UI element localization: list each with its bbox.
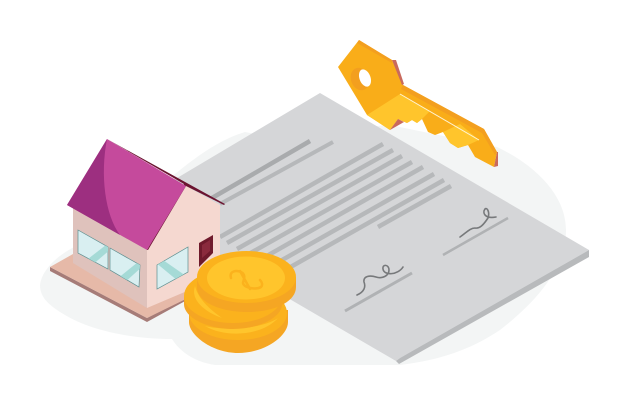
house base side (50, 267, 187, 322)
key highlight (400, 94, 479, 140)
body text lines (220, 144, 451, 273)
key body (338, 40, 497, 167)
signature left (345, 265, 412, 311)
window left 1 (78, 230, 111, 269)
right wall (147, 186, 220, 308)
window right (155, 247, 188, 289)
bottom coin (189, 286, 288, 353)
key yellow panels (367, 94, 430, 130)
window left 2 (110, 248, 143, 287)
key (338, 40, 498, 167)
roof (67, 139, 186, 250)
heading lines (212, 141, 333, 204)
middle coin (184, 269, 282, 329)
roof shadow (67, 139, 120, 235)
key top edge (357, 40, 497, 155)
document sheet (130, 93, 589, 361)
roof eave (107, 139, 225, 250)
top coin (197, 251, 296, 312)
door (199, 235, 213, 267)
document thickness (396, 250, 589, 364)
key red edges (390, 60, 498, 167)
key hole (348, 65, 372, 93)
house (50, 139, 225, 322)
document (130, 93, 589, 364)
coins (184, 251, 296, 353)
dollar sign (231, 271, 262, 289)
left wall (73, 205, 147, 308)
house base (50, 254, 190, 318)
background blob (40, 125, 566, 365)
signature right (443, 209, 508, 255)
